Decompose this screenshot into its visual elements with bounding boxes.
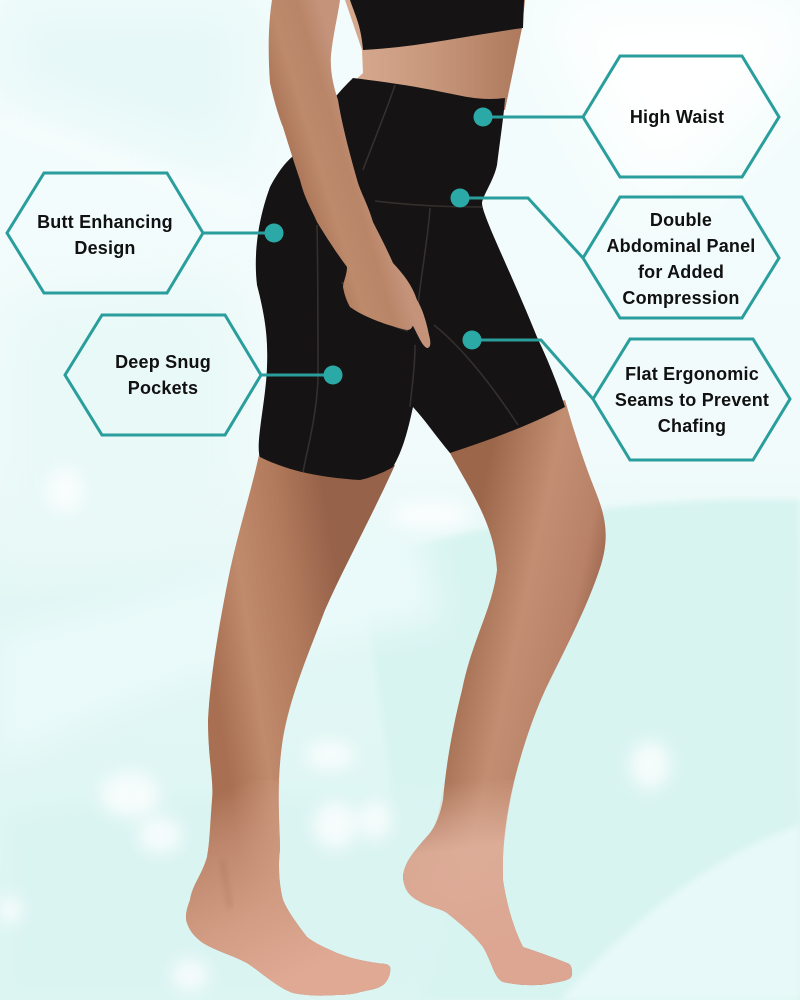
callout: Deep Snug Pockets: Pockets <box>128 378 198 398</box>
model: black crop top <box>350 0 524 50</box>
callout: Flat Ergonomic Seams: Flat Ergonomic <box>625 364 759 384</box>
model: near leg and foot <box>186 450 395 996</box>
callout: Double Abdominal Panel: Compression <box>622 288 740 308</box>
callout: Flat Ergonomic Seams: Chafing <box>658 416 726 436</box>
callout: Double Abdominal Panel <box>450 188 779 318</box>
callout: Butt Enhancing Design: Butt Enhancing <box>37 212 173 232</box>
model: arm and hand in pocket <box>269 0 430 348</box>
callout: Butt Enhancing Design: Design <box>74 238 136 258</box>
callout: Deep Snug Pockets: Deep Snug <box>115 352 211 372</box>
callout: Double Abdominal Panel: Abdominal Panel <box>606 236 756 256</box>
callout: High Waist <box>474 56 779 177</box>
callout: Butt Enhancing Design <box>7 173 284 293</box>
callout: Double Abdominal Panel: Double <box>650 210 712 230</box>
callout: Double Abdominal Panel: for Added <box>638 262 724 282</box>
model: black shorts <box>256 78 565 480</box>
callout: Flat Ergonomic Seams: Seams to Prevent <box>615 390 769 410</box>
callout: High Waist: High Waist <box>630 107 724 127</box>
model: far leg and foot <box>403 400 606 985</box>
callout: Flat Ergonomic Seams <box>462 330 790 460</box>
shorts seams <box>303 85 518 472</box>
model: torso <box>345 0 525 110</box>
callout: Deep Snug Pockets <box>65 315 342 435</box>
